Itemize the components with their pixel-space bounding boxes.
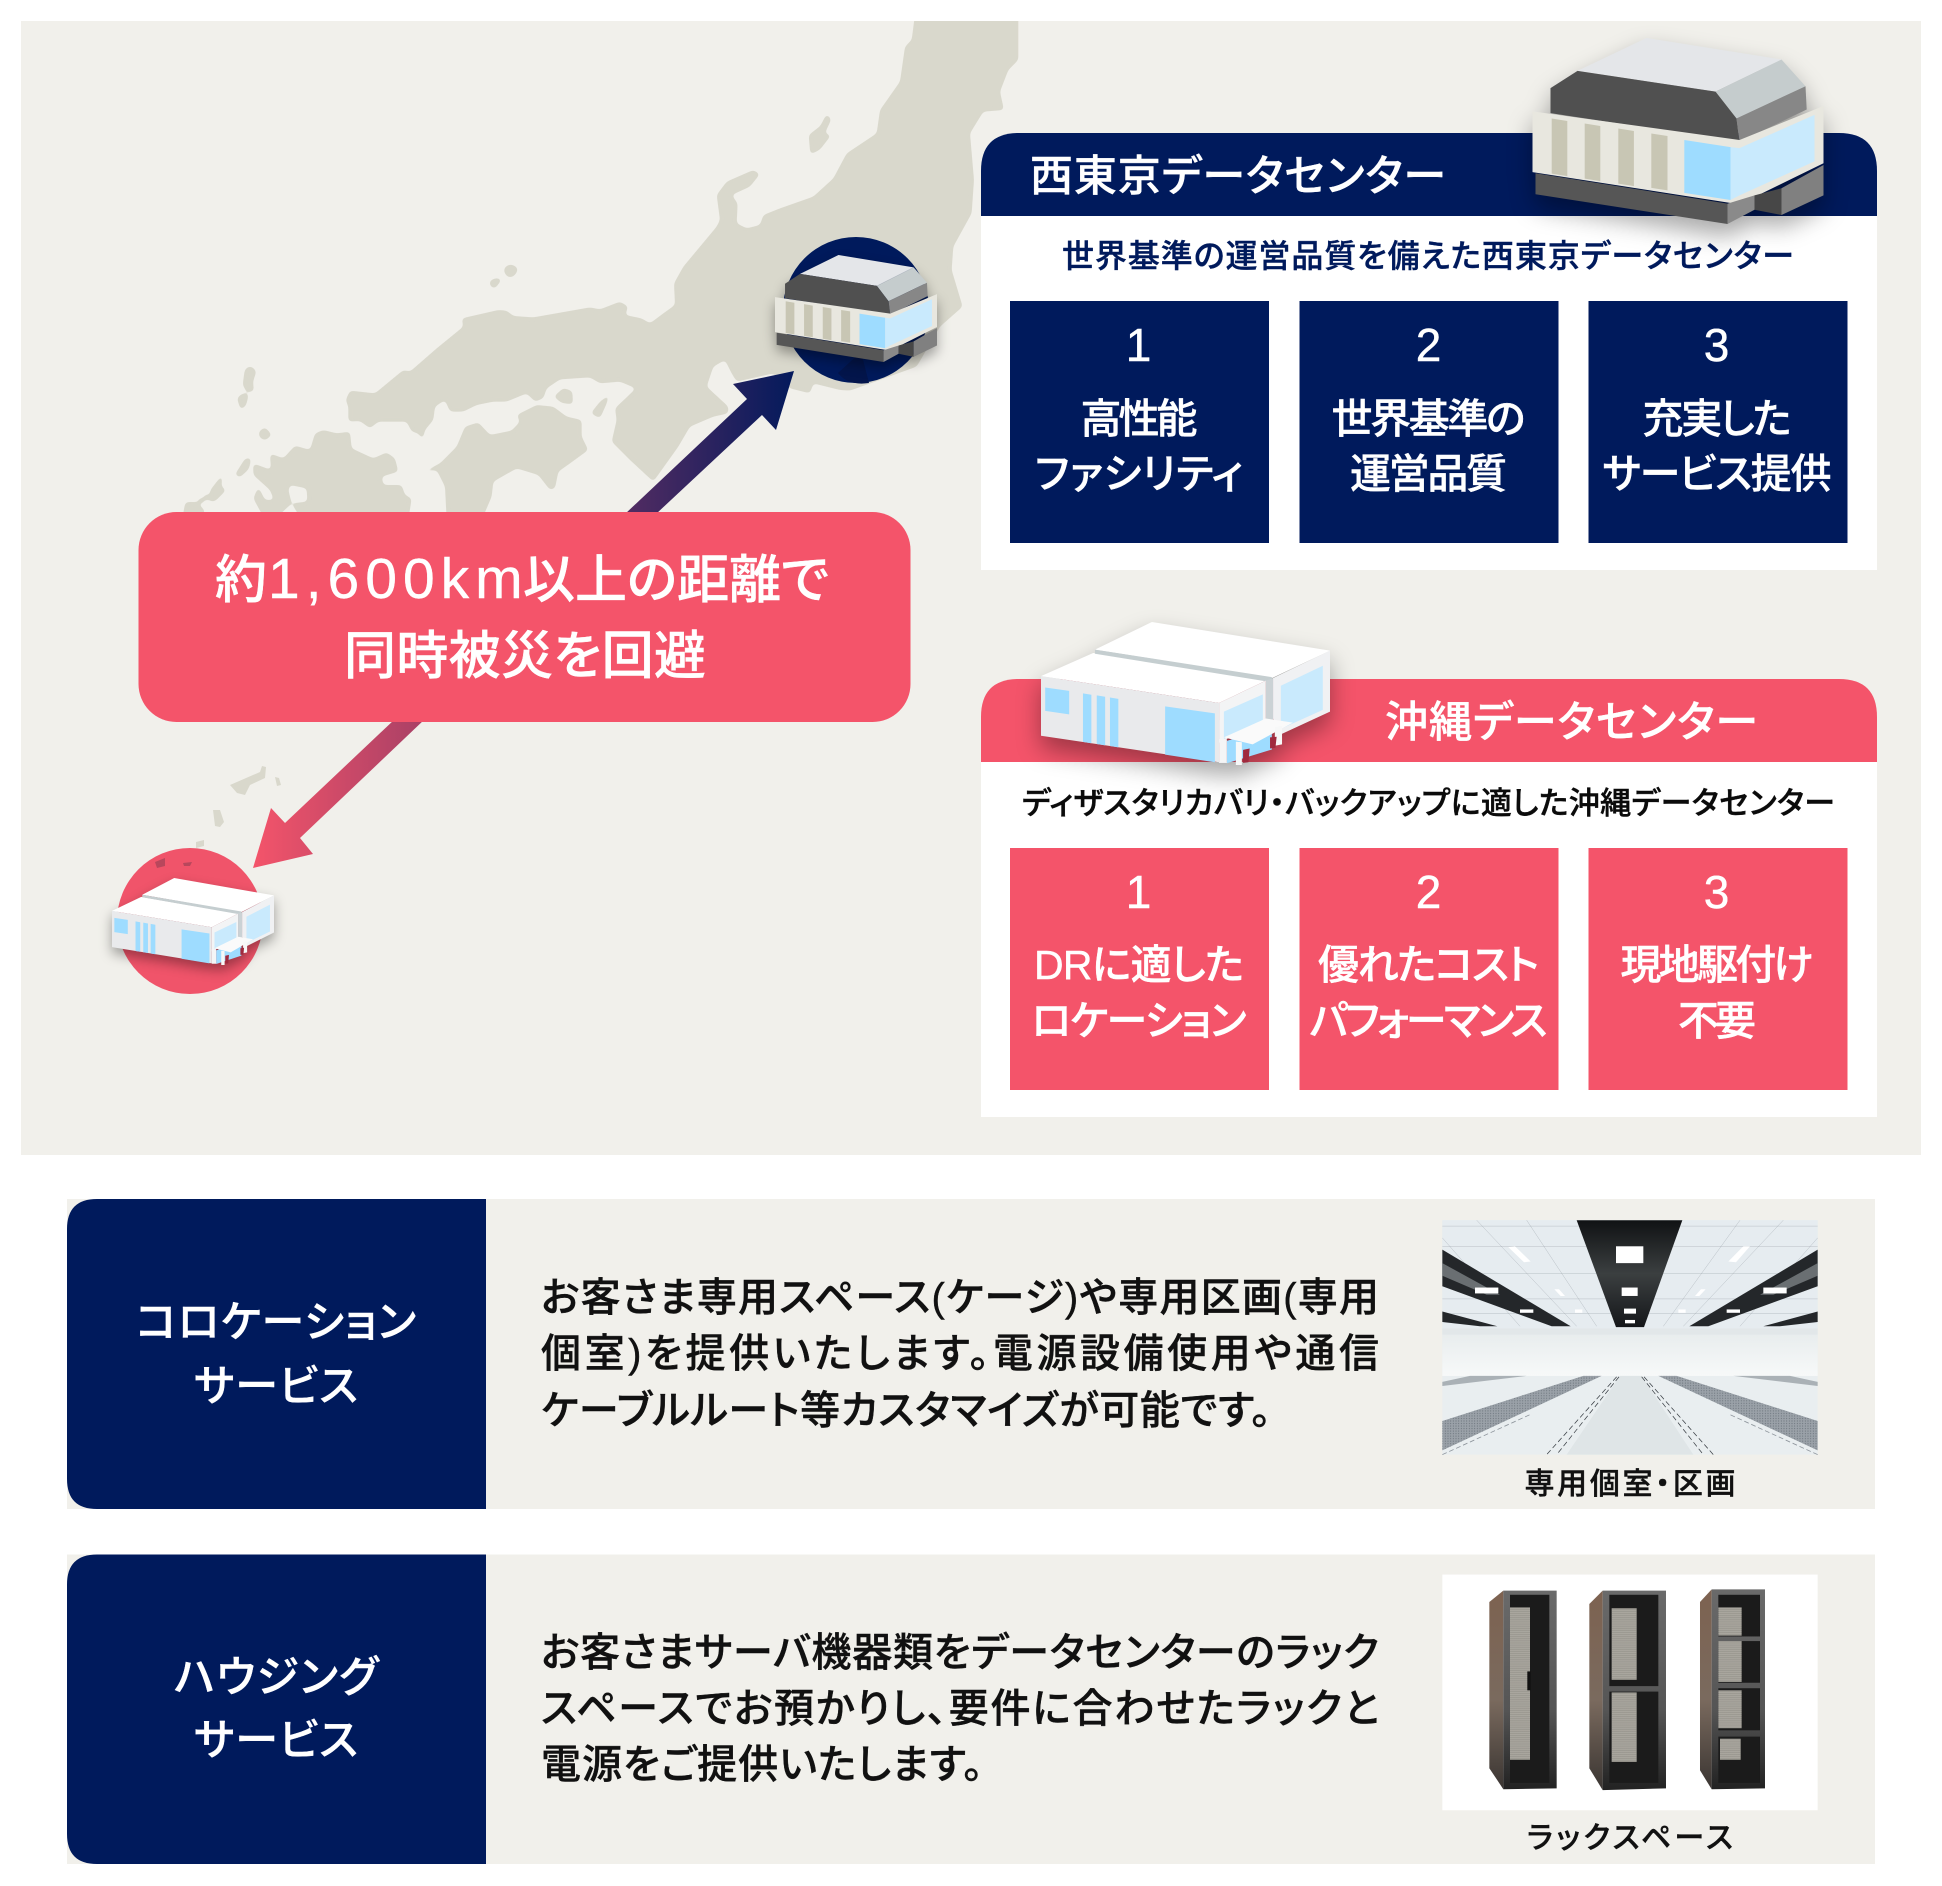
text: housing description: お客さまサーバ機器類をデータセンターのラック xyxy=(541,1631,1379,1675)
header: west Tokyo xyxy=(981,133,1877,216)
panel: west Tokyo data center xyxy=(981,133,1877,570)
label: housing xyxy=(67,1554,486,1864)
label: colocation xyxy=(67,1199,486,1509)
label: housing: サービス xyxy=(194,1717,358,1765)
label: colocation: コロケーション xyxy=(136,1299,416,1347)
feature 1: ファシリティ xyxy=(1035,451,1243,497)
feature 3 xyxy=(1588,301,1848,543)
text: housing description: 電源をご提供いたします。 xyxy=(541,1743,983,1787)
heading: Okinawa: 沖縄データセンター xyxy=(1385,699,1758,747)
icon: Okinawa building large xyxy=(1041,622,1330,765)
feature 1: 高性能 xyxy=(1080,396,1198,442)
feature 2 xyxy=(1300,301,1558,543)
feature 1: 1 xyxy=(1126,866,1151,918)
circle: west Tokyo location xyxy=(783,237,929,384)
label: colocation: サービス xyxy=(194,1363,358,1411)
feature 3: 現地駆付け xyxy=(1620,942,1814,988)
feature 3: 3 xyxy=(1704,319,1729,371)
text: colocation description: 個室)を提供いたします。電源設備使用や通信 xyxy=(541,1332,1379,1376)
heading: west Tokyo: 西東京データセンター xyxy=(1030,153,1446,201)
subtitle: Okinawa: ディザスタリカバリ・バックアップに適した沖縄データセンター xyxy=(1022,786,1835,821)
callout: distance xyxy=(138,512,910,722)
map of Japan xyxy=(182,7,1018,520)
caption: private room: 専用個室・区画 xyxy=(1524,1468,1736,1501)
feature 3: サービス提供 xyxy=(1602,451,1832,497)
arrow: to Okinawa xyxy=(253,719,425,868)
feature 1 xyxy=(1010,301,1269,543)
callout: distance: 同時被災を回避 xyxy=(344,628,706,686)
icon: west Tokyo building small xyxy=(775,255,937,362)
feature 3: 不要 xyxy=(1678,998,1756,1044)
text: colocation description: お客さま専用スペース(ケージ)や専用区画(専用 xyxy=(541,1276,1379,1320)
callout: distance: 以上の距離で xyxy=(523,552,829,610)
icon: west Tokyo building large xyxy=(1532,38,1824,224)
feature 1 xyxy=(1010,848,1269,1090)
header: Okinawa xyxy=(981,679,1877,762)
callout: distance: 1,600km xyxy=(268,547,529,611)
feature 1: 1 xyxy=(1126,319,1151,371)
icon: Okinawa building small xyxy=(112,878,274,965)
text: housing description: スペースでお預かりし、要件に合わせたラックと xyxy=(541,1687,1379,1731)
panel: Okinawa data center xyxy=(981,679,1877,1117)
feature 2: 運営品質 xyxy=(1350,451,1507,497)
feature 2: パフォーマンス xyxy=(1310,998,1548,1044)
panel: housing service xyxy=(67,1554,1875,1864)
subtitle: west Tokyo: 世界基準の運営品質を備えた西東京データセンター xyxy=(1062,238,1794,274)
feature 3: 充実した xyxy=(1642,396,1792,442)
panel: colocation service xyxy=(67,1199,1875,1509)
photo: data center room xyxy=(1442,1220,1818,1455)
feature 2: 2 xyxy=(1416,319,1441,371)
feature 2: 2 xyxy=(1416,866,1441,918)
feature 1: ロケーション xyxy=(1032,998,1247,1044)
feature 1: DRに適した xyxy=(1034,942,1244,988)
feature 2 xyxy=(1300,848,1558,1090)
feature 3: 3 xyxy=(1704,866,1729,918)
feature 3 xyxy=(1588,848,1848,1090)
label: housing: ハウジング xyxy=(174,1654,380,1702)
arrow: to west Tokyo xyxy=(625,371,794,514)
panel: map background xyxy=(21,21,1921,1155)
text: colocation description: ケーブルルート等カスタマイズが可能です。 xyxy=(541,1389,1271,1433)
feature 2: 優れたコスト xyxy=(1318,942,1539,988)
feature 2: 世界基準の xyxy=(1332,396,1526,442)
text: housing description xyxy=(541,1631,1379,1787)
caption: rack space: ラックスペース xyxy=(1527,1822,1733,1855)
callout: distance: 約 xyxy=(215,552,267,610)
circle: Okinawa location xyxy=(117,848,263,994)
map: southern islands xyxy=(196,766,281,848)
photo: server racks xyxy=(1442,1575,1818,1810)
text: colocation description xyxy=(541,1276,1379,1433)
